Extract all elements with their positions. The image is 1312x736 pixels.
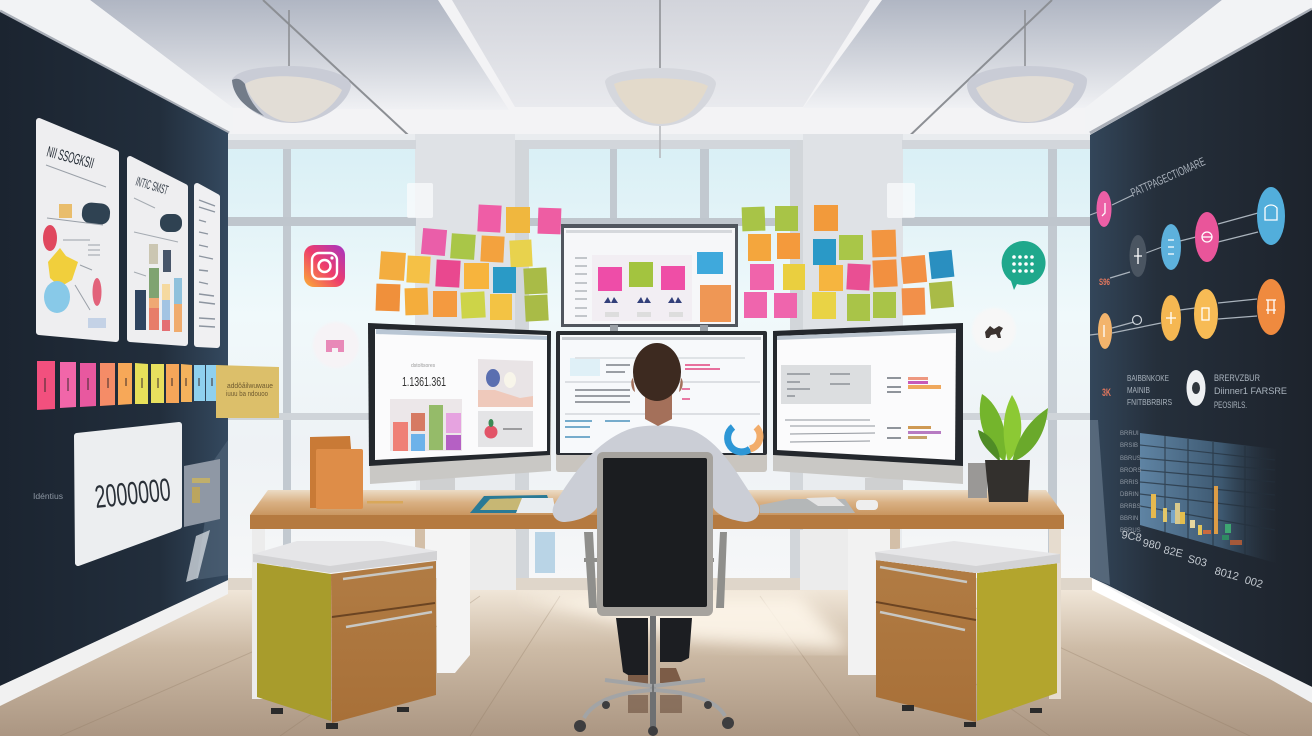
chart axis labels: BRRBS bbox=[1120, 504, 1141, 510]
left monitor bbox=[368, 323, 551, 499]
donut chart bbox=[728, 427, 760, 452]
data chart bbox=[1140, 433, 1276, 563]
chart axis labels: BBRIN bbox=[1120, 516, 1138, 522]
screen map panel bbox=[478, 359, 533, 407]
poster 2 bbox=[130, 159, 185, 343]
drawer handle lower bbox=[880, 612, 965, 630]
windows and back wall bbox=[228, 134, 1092, 597]
small grey box bbox=[968, 463, 987, 498]
right dark wall bbox=[1090, 10, 1312, 703]
head bbox=[633, 343, 681, 401]
small grey card bbox=[184, 459, 220, 527]
chart year labels: 9C8 bbox=[1120, 529, 1142, 544]
small label: S96 bbox=[1099, 277, 1110, 287]
desk bbox=[250, 490, 1064, 699]
chart axis labels: BBRUS bbox=[1120, 528, 1141, 534]
node: small orange bbox=[1098, 313, 1112, 349]
chart year labels: 82E bbox=[1162, 544, 1184, 560]
wood drawers bbox=[876, 560, 976, 722]
right monitor screen bbox=[777, 329, 956, 460]
green card bbox=[629, 262, 653, 287]
yellow blob bbox=[48, 248, 78, 287]
chart year labels: 8012 bbox=[1213, 565, 1240, 583]
poster 1 heading: NII SSOGKSII bbox=[45, 143, 96, 172]
blue note bbox=[697, 252, 723, 274]
centre monitor bbox=[556, 325, 767, 472]
node: amber bbox=[1194, 289, 1218, 339]
chair arms bbox=[584, 532, 727, 608]
right text block: Diinner1 FARSRE bbox=[1214, 386, 1287, 396]
poster 3 bbox=[197, 186, 217, 345]
orange note bbox=[700, 285, 731, 322]
person bbox=[553, 343, 759, 713]
sticky notes left bbox=[376, 204, 561, 322]
sticky notes right bbox=[742, 205, 954, 321]
screen bar chart bbox=[390, 399, 462, 451]
small accent label: 3K bbox=[1102, 387, 1111, 399]
poster 2: INTIC SMST bbox=[134, 174, 170, 198]
far right desk leg bbox=[1049, 529, 1061, 699]
network diagram row 1 bbox=[1090, 187, 1285, 278]
big number card bbox=[77, 425, 179, 563]
chart axis labels: BRRUI bbox=[1120, 431, 1139, 437]
white pink-logo bubble bbox=[313, 322, 359, 368]
yellow note card bbox=[216, 365, 279, 418]
drawer handle upper bbox=[343, 567, 433, 579]
cabinet top bbox=[253, 541, 437, 573]
chart bars bbox=[1151, 486, 1242, 545]
shoes bbox=[628, 668, 682, 684]
wood drawers bbox=[331, 561, 436, 723]
chair wheels bbox=[574, 701, 734, 736]
floor bbox=[0, 590, 1312, 736]
pot bbox=[985, 460, 1030, 502]
left text block: BAIBBNKOKE bbox=[1127, 373, 1169, 383]
chair pole bbox=[650, 612, 656, 728]
chair back bbox=[597, 452, 713, 616]
yellow note card: iuuu ba ndouoo bbox=[226, 391, 268, 398]
lamp right bbox=[967, 10, 1087, 123]
network diagram row 2 bbox=[1090, 279, 1285, 349]
left monitor: dstoltsores bbox=[411, 363, 436, 369]
right monitor stand bbox=[838, 478, 903, 499]
tan leg post right bbox=[890, 529, 900, 549]
chart axis labels: BRSIB bbox=[1120, 443, 1138, 449]
coral blob bbox=[92, 278, 102, 306]
orange folders bbox=[310, 436, 363, 509]
white dark-logo bubble bbox=[972, 308, 1016, 352]
drawer handle upper bbox=[880, 567, 967, 582]
left monitor screen bbox=[375, 329, 547, 460]
chart axis labels: BRORS bbox=[1120, 468, 1141, 474]
desk pen bbox=[367, 501, 403, 504]
poster 1 bbox=[39, 121, 116, 339]
left dark wall bbox=[0, 12, 228, 706]
node: large orange bbox=[1257, 279, 1285, 335]
hanging sleeve right bbox=[887, 183, 915, 218]
chair base bbox=[584, 680, 725, 718]
chat bubble icon bbox=[1002, 241, 1046, 290]
chart year labels: 980 bbox=[1141, 537, 1162, 553]
desk block left bbox=[425, 529, 470, 673]
shirt bbox=[553, 426, 759, 522]
left filing cabinet bbox=[253, 541, 437, 729]
screen bars bottom bbox=[887, 426, 941, 439]
node: blue bbox=[1161, 224, 1181, 270]
big number card: 2000000 bbox=[93, 471, 172, 515]
right monitor bbox=[773, 323, 963, 499]
node: grey bbox=[1130, 235, 1146, 277]
drawer handle lower bbox=[346, 612, 432, 627]
left monitor: 1.1361.361 bbox=[402, 374, 446, 389]
olive side bbox=[257, 563, 331, 721]
lamp left bbox=[232, 10, 351, 123]
chart axis labels: DBRIN bbox=[1120, 492, 1139, 498]
left text block bbox=[1127, 373, 1172, 407]
right wall heading: PATTPAGECTIOMARE bbox=[1129, 154, 1207, 200]
trousers bbox=[616, 618, 692, 675]
screen bars top bbox=[887, 377, 941, 393]
blue blob bbox=[44, 281, 70, 313]
yellow note card: addôåilwuwaue bbox=[227, 382, 273, 390]
ears bbox=[631, 378, 683, 392]
left text block: FNITBBRBIRS bbox=[1127, 397, 1172, 407]
node: large blue bbox=[1257, 187, 1285, 245]
neck bbox=[645, 395, 672, 426]
ceiling bbox=[0, 0, 1312, 147]
wall caption: Idéntius bbox=[33, 492, 63, 501]
left monitor stand bbox=[420, 478, 483, 499]
node: magenta bbox=[1195, 212, 1219, 262]
instagram icon bbox=[304, 245, 345, 287]
centre monitor screen bbox=[560, 335, 763, 453]
chart year labels: S03 bbox=[1186, 553, 1208, 570]
pink blob bbox=[43, 225, 57, 251]
right text block bbox=[1214, 373, 1287, 410]
dark pill bbox=[81, 202, 111, 225]
leaves bbox=[978, 394, 1048, 462]
olive side bbox=[977, 563, 1057, 721]
pink card bbox=[661, 266, 685, 290]
node: yellow bbox=[1161, 295, 1181, 341]
right text block: PEOSIRLS. bbox=[1214, 400, 1247, 410]
node: pink bbox=[1096, 191, 1112, 227]
top monitor bbox=[561, 224, 738, 327]
dark pill bbox=[160, 214, 182, 232]
cabinet top bbox=[875, 541, 1060, 573]
top monitor screen bbox=[564, 228, 735, 324]
cabinet wheels bbox=[271, 707, 409, 729]
white icon circle bbox=[1186, 370, 1206, 406]
right filing cabinet bbox=[875, 541, 1060, 727]
potted plant bbox=[978, 394, 1048, 502]
pink card bbox=[598, 267, 622, 291]
hanging sleeve left bbox=[407, 183, 433, 218]
chart axis labels: BBRUS bbox=[1120, 456, 1141, 462]
desk tablet bbox=[470, 495, 556, 513]
office chair bbox=[574, 452, 734, 736]
right text block: BRERVZBUR bbox=[1214, 373, 1260, 383]
chart axis labels: BRRIS bbox=[1120, 480, 1138, 486]
chart year labels bbox=[1120, 529, 1264, 591]
left text block: MAINIB bbox=[1127, 385, 1150, 395]
screen fruit panel bbox=[478, 411, 533, 447]
grey info box bbox=[781, 365, 871, 404]
chart axis labels bbox=[1120, 431, 1141, 534]
cabinet wheels bbox=[902, 705, 1042, 727]
chart year labels: 002 bbox=[1243, 574, 1264, 591]
shoe reflections bbox=[628, 695, 682, 713]
lamp centre bbox=[605, 0, 716, 158]
desk papers and mouse bbox=[760, 497, 878, 513]
colour swatch strip bbox=[37, 361, 217, 410]
desk block right bbox=[848, 529, 890, 675]
far left desk leg bbox=[252, 529, 265, 699]
tan leg post left bbox=[415, 529, 425, 559]
stacked bar chart bbox=[135, 268, 182, 332]
outline glyph bbox=[1132, 316, 1142, 324]
